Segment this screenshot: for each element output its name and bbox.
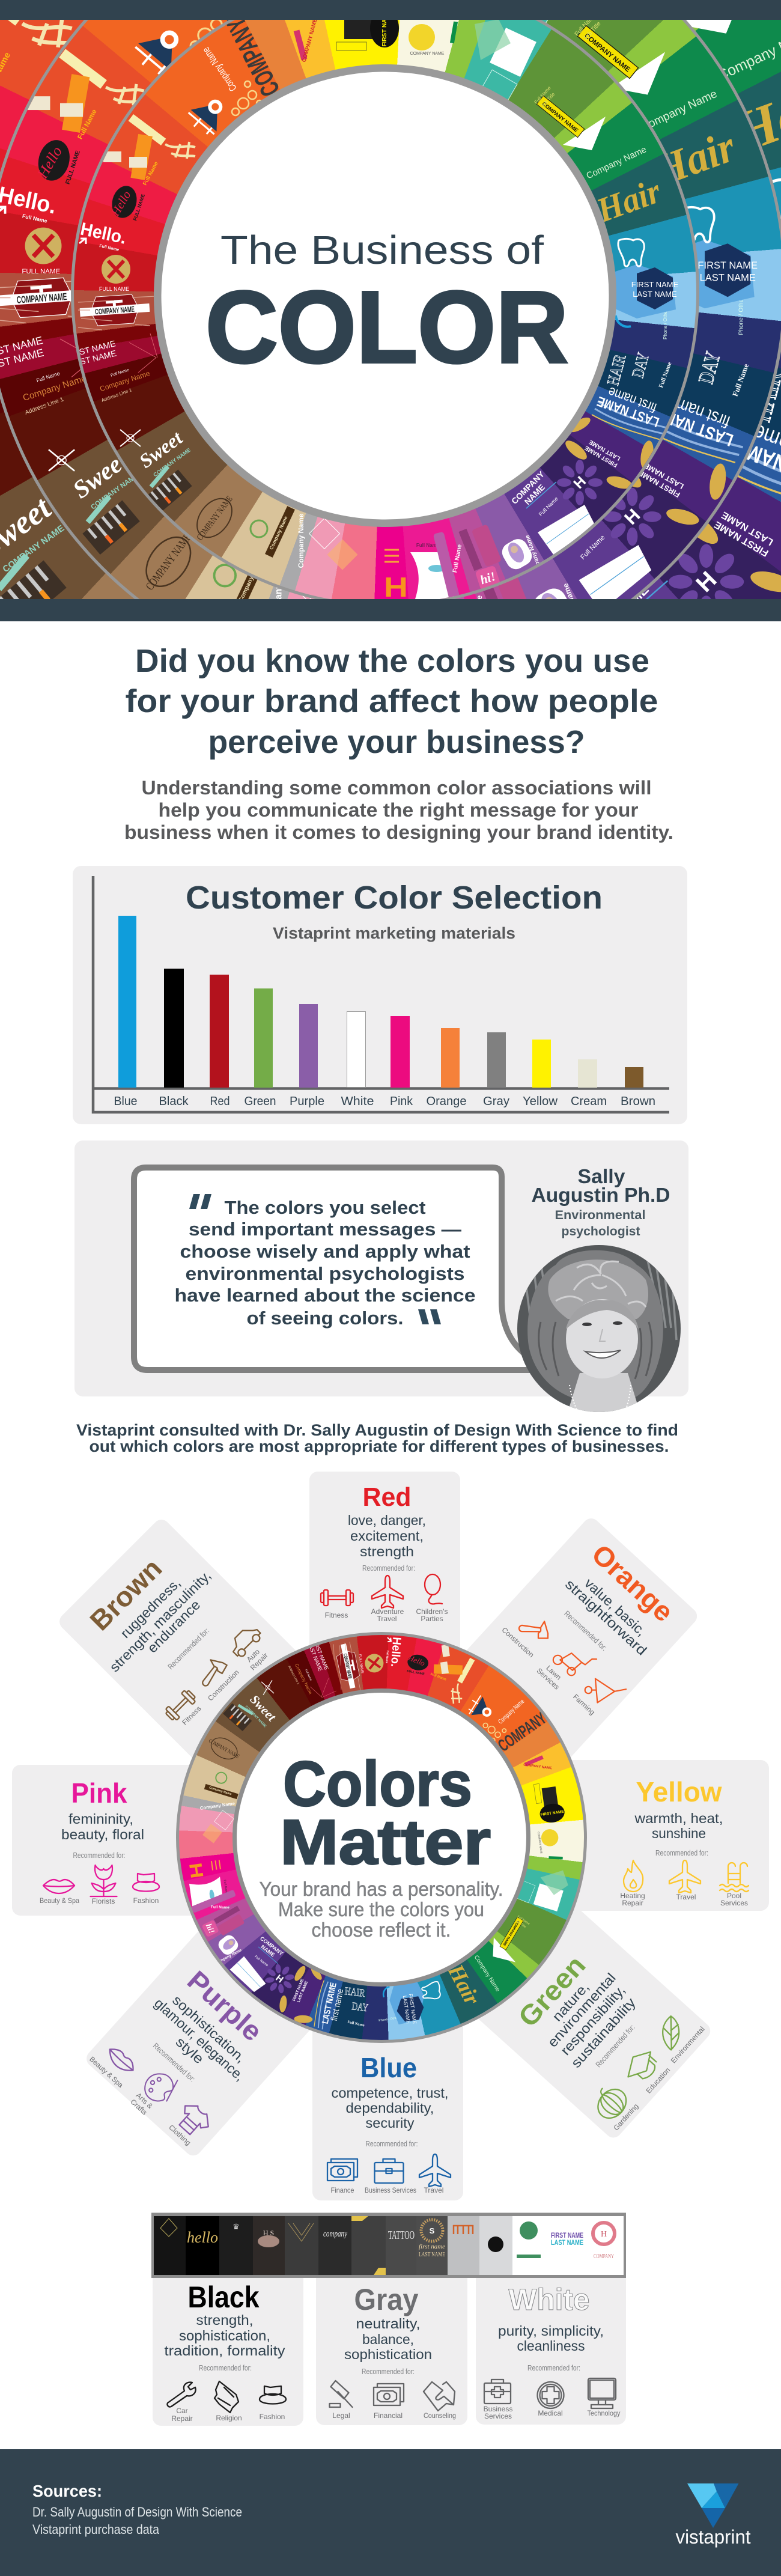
icon: lips (105, 2045, 137, 2076)
wheel centre circle (232, 1688, 530, 1987)
black labels: Repair (171, 2414, 193, 2423)
icon: plane (372, 1576, 403, 1608)
chart title: Customer Color Selection (186, 880, 603, 916)
consulted text: Vistaprint consulted with Dr. Sally Augustin of Design With Science to find (76, 1421, 678, 1439)
icon: plane (669, 1860, 700, 1893)
red labels: Fitness (325, 1611, 348, 1619)
business cards artwork: Full Name (142, 160, 159, 186)
green labels (610, 2025, 708, 2132)
pink description: femininity, (68, 1811, 133, 1827)
brown description (95, 1556, 223, 1684)
business card strip: S (430, 2226, 435, 2235)
bar labels: Gray (483, 1095, 509, 1108)
black description: tradition, formality (165, 2343, 285, 2358)
purple labels: Beauty & Spa (88, 2055, 125, 2089)
brown labels: Repair (249, 1651, 270, 1672)
recommended: Recommended for: (199, 2363, 252, 2372)
business cards artwork: COMPANY NAME (195, 495, 235, 543)
black labels (171, 2407, 285, 2423)
blue description: security (365, 2115, 415, 2131)
bar labels: Green (244, 1095, 276, 1108)
purple description: sophistication, (169, 1992, 249, 2066)
white labels (484, 2405, 620, 2420)
vistaprint logo: vistaprint (675, 2526, 751, 2548)
orange description (562, 1566, 659, 1658)
business card strip: H S (263, 2229, 274, 2237)
pink title: Pink (71, 1777, 127, 1809)
icon: lawn mower (553, 1653, 597, 1676)
icon: shirt (173, 2099, 214, 2140)
business cards artwork: FULL NAME (99, 286, 129, 292)
business cards artwork: FIRST NAME (631, 280, 679, 289)
black labels: Religion (216, 2414, 242, 2422)
panel: yellow (529, 1760, 769, 1911)
business card strip: FIRST NAME (551, 2231, 583, 2240)
icon: lips (43, 1880, 74, 1893)
orange title: Orange (586, 1538, 679, 1628)
gray description: sophistication (344, 2346, 432, 2362)
yellow labels: Heating (620, 1892, 645, 1900)
red labels: Travel (377, 1615, 397, 1623)
business cards artwork: NAME (523, 483, 547, 507)
heading: for your brand affect how people (125, 683, 658, 719)
white labels: Technology (588, 2409, 620, 2417)
name and title: psychologist (561, 1225, 640, 1238)
heading: Did you know the colors you use (135, 643, 649, 679)
icon: pool ladder (720, 1863, 749, 1892)
icon: medical cross (537, 2382, 564, 2408)
business card strip: COMPANY (594, 2253, 614, 2260)
business cards artwork: Job Title (540, 91, 556, 108)
recommended: Recommended for: (166, 1626, 211, 1671)
sources heading: Sources: (32, 2482, 102, 2500)
orange labels: Construction (500, 1625, 536, 1659)
sources list (32, 2504, 242, 2537)
blue labels: Business Services (365, 2186, 416, 2194)
black labels: Car (176, 2407, 188, 2415)
recommended: Recommended for: (362, 2367, 415, 2376)
quote text: environmental psychologists (185, 1263, 465, 1284)
brown labels: Auto (245, 1647, 261, 1664)
business cards artwork: first name (606, 384, 658, 416)
panel: brown (56, 1516, 332, 1792)
icon: hat (260, 2386, 286, 2404)
business cards artwork: LAST NAME (588, 438, 622, 461)
blue title: Blue (360, 2052, 417, 2083)
blue description: dependability, (346, 2100, 434, 2116)
hero: business card color wheel (0, 20, 781, 599)
name and title: Environmental (555, 1208, 645, 1222)
bar labels (114, 1095, 655, 1108)
business cards artwork: Full Name (658, 361, 673, 389)
red description: strength (360, 1544, 414, 1559)
colors matter title (280, 1749, 490, 1878)
bar labels: Cream (571, 1095, 607, 1108)
red description: excitement, (350, 1528, 424, 1544)
brown labels (180, 1644, 270, 1734)
business cards artwork: Company Name (524, 534, 546, 579)
panel: pink (12, 1765, 240, 1916)
wheel business card artwork (156, 1607, 591, 2053)
red labels: Parties (421, 1615, 443, 1623)
icon: praying hands (214, 2381, 239, 2413)
purple description: glamour, elegance, (151, 1995, 248, 2084)
business card strip: LAST NAME (419, 2251, 445, 2258)
title: COLOR: COLOR (205, 270, 568, 385)
business cards artwork: COMPANY NAME (541, 101, 579, 133)
business cards artwork: DAY (628, 351, 653, 380)
green labels: Environmental (669, 2025, 707, 2065)
icon: car (227, 1623, 263, 1659)
business cards artwork: HAIR (604, 352, 630, 388)
icon: plane (419, 2154, 451, 2187)
yellow labels: Services (720, 1899, 748, 1907)
red labels: Adventure (371, 1607, 404, 1616)
business cards artwork: Company Name (99, 369, 151, 393)
intro text (124, 777, 673, 843)
icon: tulip (90, 1865, 117, 1896)
green description: sustainability (568, 1994, 639, 2071)
panel: purple (82, 1881, 354, 2161)
colors matter subtitle: Make sure the colors you (278, 1898, 484, 1920)
orange labels (496, 1624, 598, 1720)
orange labels: Farming (571, 1693, 597, 1717)
icon: handshake (424, 2382, 455, 2411)
gray labels: Financial (374, 2411, 403, 2420)
gray description: balance, (362, 2331, 414, 2347)
brown description: endurance (144, 1597, 203, 1656)
vistaprint logo (675, 2483, 751, 2548)
consulted text (76, 1421, 678, 1455)
icon: cash (374, 2384, 404, 2405)
business card strip: company (323, 2229, 347, 2239)
bar labels: Black (159, 1095, 189, 1108)
panel: green (436, 1869, 714, 2141)
business cards artwork: Full Name (110, 368, 130, 378)
brown title: Brown (84, 1552, 168, 1636)
business card strip: ♛ (232, 2222, 240, 2231)
business cards artwork: COMPANY NAME (152, 447, 192, 478)
purple labels: Clothing (167, 2123, 192, 2147)
name and title (531, 1165, 670, 1238)
colors matter subtitle (259, 1878, 503, 1941)
blue labels: Finance (330, 2186, 354, 2194)
bars (118, 916, 643, 1088)
business cards artwork: hi! (478, 569, 497, 587)
business cards artwork: Sweet (136, 427, 187, 473)
gray description: neutrality, (356, 2316, 421, 2331)
intro text: help you communicate the right message for your (159, 799, 638, 821)
blue labels (330, 2186, 443, 2194)
recommended: Recommended for: (365, 2139, 418, 2148)
name and title: Sally (578, 1165, 625, 1187)
bar labels: Orange (427, 1095, 466, 1108)
panel: white (476, 2265, 626, 2425)
business cards artwork: H (571, 473, 589, 492)
business cards artwork: COMPANY NAME (95, 305, 135, 316)
purple description (142, 1984, 257, 2095)
hero middle ring (0, 0, 781, 687)
pink description (61, 1811, 144, 1842)
icon: briefcase (375, 2159, 404, 2183)
colors matter subtitle: choose reflect it. (311, 1919, 451, 1941)
purple labels: Arts & (135, 2091, 154, 2110)
business cards artwork: Hello (109, 189, 133, 219)
bar labels: Brown (621, 1095, 655, 1108)
green description: responsibility, (558, 1982, 628, 2058)
icon: pumpkin (589, 2080, 632, 2124)
business card strip: first name (419, 2243, 445, 2250)
black title: Black (187, 2280, 260, 2314)
yellow labels (620, 1892, 748, 1907)
pink labels (40, 1896, 159, 1905)
black description: strength, (196, 2312, 254, 2328)
business card strip: TATTOO (388, 2229, 415, 2242)
business card strip: H (601, 2230, 607, 2239)
pink labels: Florists (92, 1897, 115, 1905)
colors matter subtitle: Your brand has a personality. (259, 1878, 503, 1900)
icon: leaf (663, 2016, 679, 2050)
brown description: ruggedness, (117, 1575, 183, 1641)
panel: customer color selection chart (73, 866, 687, 1124)
business cards artwork: COMPANY (509, 469, 547, 506)
quote text: have learned about the science (174, 1285, 476, 1306)
blue description (332, 2085, 448, 2131)
bar labels: Blue (114, 1095, 137, 1108)
sources list: Vistaprint purchase data (32, 2522, 160, 2537)
white labels: Services (484, 2412, 512, 2420)
red description: love, danger, (348, 1512, 426, 1528)
name and title: Augustin Ph.D (531, 1184, 670, 1206)
colors matter title: Colors (282, 1749, 472, 1819)
yellow labels: Repair (622, 1899, 643, 1907)
icon: computer (588, 2378, 616, 2408)
blue labels: Travel (424, 2186, 443, 2194)
panel: gray (316, 2265, 467, 2425)
icon: palette (145, 2074, 177, 2101)
business cards artwork: Full Name (533, 85, 552, 105)
icon: wrench (167, 2383, 196, 2407)
gray labels: Counseling (424, 2411, 456, 2420)
quote text: The colors you select (225, 1197, 425, 1218)
icon: hat (133, 1874, 159, 1892)
bar labels: Purple (290, 1095, 324, 1108)
business cards artwork: COMPANY NAME (410, 52, 445, 56)
white description: purity, simplicity, (498, 2323, 604, 2339)
icon: graduation cap (621, 2045, 662, 2087)
white labels: Business (484, 2405, 512, 2413)
white labels: Medical (538, 2409, 563, 2417)
title: The Business of: The Business of (220, 228, 544, 273)
green title: Green (512, 1949, 591, 2033)
purple title: Purple (181, 1964, 269, 2047)
green description (534, 1961, 642, 2071)
gray description (344, 2316, 432, 2362)
business cards artwork: LAST NAME (595, 394, 661, 430)
purple description: style (173, 2034, 207, 2066)
pink description: beauty, floral (61, 1827, 144, 1842)
icon: balloon (425, 1574, 442, 1604)
recommended: Recommended for: (527, 2363, 580, 2372)
gray labels: Legal (332, 2411, 350, 2420)
bar labels: Yellow (523, 1095, 558, 1108)
panel: quote (74, 1140, 688, 1415)
top bar (0, 0, 781, 20)
consulted text: out which colors are most appropriate for different types of businesses. (89, 1437, 669, 1455)
panel: orange (428, 1515, 704, 1795)
bar labels: White (341, 1095, 374, 1108)
business cards artwork: Full Name (538, 496, 559, 517)
bar labels: Pink (390, 1095, 413, 1108)
business cards artwork (65, 9, 679, 603)
business cards artwork: Company Name (585, 144, 648, 181)
red labels: Children's (416, 1607, 448, 1616)
quote marks (189, 1194, 441, 1324)
business card strip (151, 2212, 626, 2278)
red description (348, 1512, 426, 1559)
yellow description: warmth, heat, (634, 1810, 723, 1826)
recommended: Recommended for: (594, 2023, 637, 2069)
business cards artwork: FULL NAME (132, 193, 146, 222)
icon: wheelbarrow (585, 1678, 626, 1703)
speech bubble (134, 1168, 571, 1370)
pink labels: Beauty & Spa (40, 1896, 79, 1905)
bar labels: Red (210, 1095, 229, 1108)
portrait photo (517, 1244, 682, 1415)
green description: environmental (544, 1970, 619, 2050)
business cards artwork: Full Name (99, 244, 120, 252)
icon: gavel (329, 2381, 352, 2407)
business card strip: LAST NAME (551, 2238, 583, 2247)
brown labels: Fitness (180, 1704, 203, 1727)
heading (125, 643, 658, 760)
icon: flame (624, 1860, 643, 1892)
green labels: Education (644, 2066, 672, 2095)
business cards artwork: Phone / Other (663, 309, 668, 340)
yellow title: Yellow (636, 1776, 722, 1807)
business cards artwork: Full Name (452, 544, 463, 573)
sources list: Dr. Sally Augustin of Design With Science (32, 2504, 242, 2520)
brown labels: Construction (206, 1668, 241, 1703)
black description (165, 2312, 285, 2358)
orange labels: Services (535, 1666, 561, 1691)
purple labels: Crafts (129, 2098, 149, 2116)
business cards artwork: LAST NAME (633, 290, 677, 299)
recommended: Recommended for: (151, 2041, 197, 2084)
quote text: send important messages — (189, 1219, 461, 1240)
gray title: Gray (354, 2283, 419, 2316)
icon: dumbbell (321, 1590, 353, 1606)
icon: dumbbell (163, 1688, 198, 1722)
recommended: Recommended for: (73, 1851, 125, 1860)
yellow description: sunshine (652, 1825, 706, 1841)
quote text: of seeing colors. (246, 1308, 404, 1329)
icon: hammer (198, 1657, 227, 1690)
chart axes (93, 876, 669, 1112)
chart subtitle: Vistaprint marketing materials (273, 924, 515, 942)
quote text: choose wisely and apply what (180, 1241, 470, 1262)
brown description: strength, masculinity, (106, 1568, 214, 1675)
intro text: business when it comes to designing your brand identity. (124, 821, 673, 843)
panel: blue (312, 1971, 463, 2200)
quote text (174, 1197, 476, 1329)
business card strip: hello (187, 2229, 218, 2246)
footer (0, 2449, 781, 2576)
business cards artwork: Hair (591, 171, 666, 230)
white title: White (508, 2283, 590, 2316)
orange description: straightforward (562, 1576, 650, 1658)
intro text: Understanding some common color associations will (142, 777, 651, 799)
hero bottom bar (0, 599, 781, 621)
heading: perceive your business? (208, 724, 585, 760)
white description (498, 2323, 604, 2354)
icon: cash (327, 2159, 357, 2181)
recommended: Recommended for: (362, 1564, 415, 1573)
title circle (154, 64, 616, 527)
yellow labels: Pool (727, 1892, 741, 1900)
business cards artwork: Company Name (200, 45, 239, 93)
purple labels (85, 2052, 193, 2152)
icon: briefcase (484, 2380, 511, 2404)
green labels: Gardening (612, 2102, 640, 2132)
business cards artwork: Company Name (297, 513, 305, 568)
colors matter wheel (175, 1632, 586, 2043)
panel: black (153, 2265, 303, 2426)
business cards artwork: Full Name (416, 543, 440, 548)
black description: sophistication, (179, 2328, 270, 2343)
orange labels: Lawn (544, 1664, 563, 1682)
colors matter title: Matter (280, 1807, 490, 1878)
green description: nature, (549, 1979, 592, 2024)
blue description: competence, trust, (332, 2085, 448, 2101)
recommended: Recommended for: (562, 1609, 609, 1652)
red labels (325, 1607, 448, 1623)
hero inner ring (71, 0, 699, 607)
icon: hammer (519, 1621, 548, 1638)
recommended: Recommended for: (655, 1848, 708, 1857)
business cards artwork: Company Name (269, 515, 289, 550)
business cards artwork: Address Line 1 (101, 387, 133, 403)
business cards artwork: Hello. (79, 219, 128, 248)
yellow labels: Travel (676, 1893, 696, 1901)
orange description: value, basic, (582, 1575, 649, 1639)
pink labels: Fashion (133, 1896, 159, 1905)
business cards artwork: FIRST NAME (583, 444, 619, 468)
yellow description (634, 1810, 723, 1841)
black labels: Fashion (260, 2413, 285, 2421)
panel: red (309, 1472, 460, 1700)
gray labels (332, 2411, 456, 2420)
white description: cleanliness (517, 2338, 585, 2354)
red title: Red (363, 1482, 411, 1512)
